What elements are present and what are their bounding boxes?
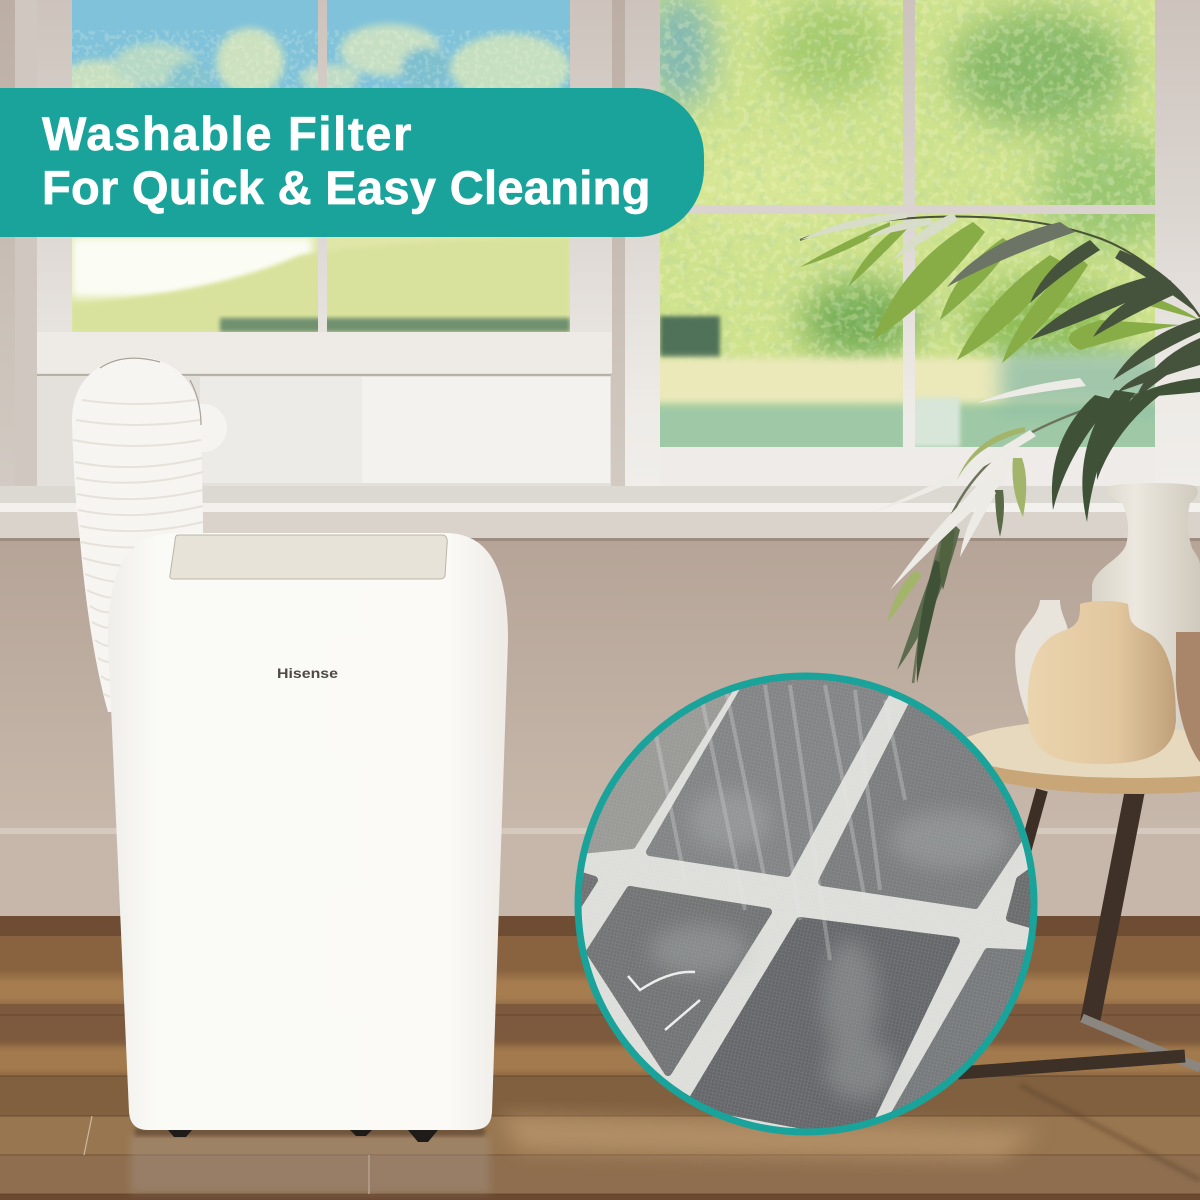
left window view <box>60 0 570 332</box>
window insert panel <box>37 373 611 486</box>
unit body <box>108 533 508 1130</box>
pale leaf tips <box>800 213 958 260</box>
window surround <box>0 0 1200 505</box>
water residue <box>650 790 1010 1100</box>
filter frame base <box>578 676 1034 1132</box>
light green leaflets <box>800 222 1200 363</box>
pale green leaflets <box>887 427 1026 623</box>
brown vase <box>1176 632 1200 762</box>
side table <box>955 718 1200 1073</box>
teal circle outline <box>578 676 1034 1132</box>
portable air conditioner <box>108 533 508 1142</box>
exhaust hose <box>72 357 203 712</box>
headline text: Washable Filter <box>42 107 413 160</box>
vases <box>1015 483 1200 764</box>
water streams <box>655 685 905 960</box>
magnified filter circle <box>578 676 1040 1140</box>
headline text <box>42 107 651 214</box>
tall white vase <box>1092 483 1200 730</box>
lower dark leaflets <box>897 378 1200 683</box>
top panel <box>170 535 447 579</box>
upper frond stem <box>800 216 1200 317</box>
small white vase <box>1015 600 1068 740</box>
right window frame <box>625 0 1200 505</box>
wall <box>0 540 1200 830</box>
round tan vase <box>1028 601 1176 764</box>
white leaflets <box>870 378 1086 590</box>
filter mesh panes <box>578 676 1040 1140</box>
dark leaflets <box>947 222 1200 400</box>
potted plant leaves <box>800 213 1200 683</box>
left window frame <box>15 0 612 505</box>
residue streaks <box>628 972 700 1030</box>
mesh texture <box>580 680 1040 1140</box>
wainscot <box>0 830 1200 916</box>
brand logo: Hisense <box>277 665 338 681</box>
lower frond stem <box>913 383 1200 683</box>
headline text: For Quick & Easy Cleaning <box>42 161 651 214</box>
right window view <box>648 0 1180 454</box>
window sill <box>0 486 1200 541</box>
floor <box>0 916 1200 1200</box>
casters <box>168 1130 438 1142</box>
wainscot rail <box>0 828 1200 834</box>
teal headline banner <box>0 88 704 237</box>
